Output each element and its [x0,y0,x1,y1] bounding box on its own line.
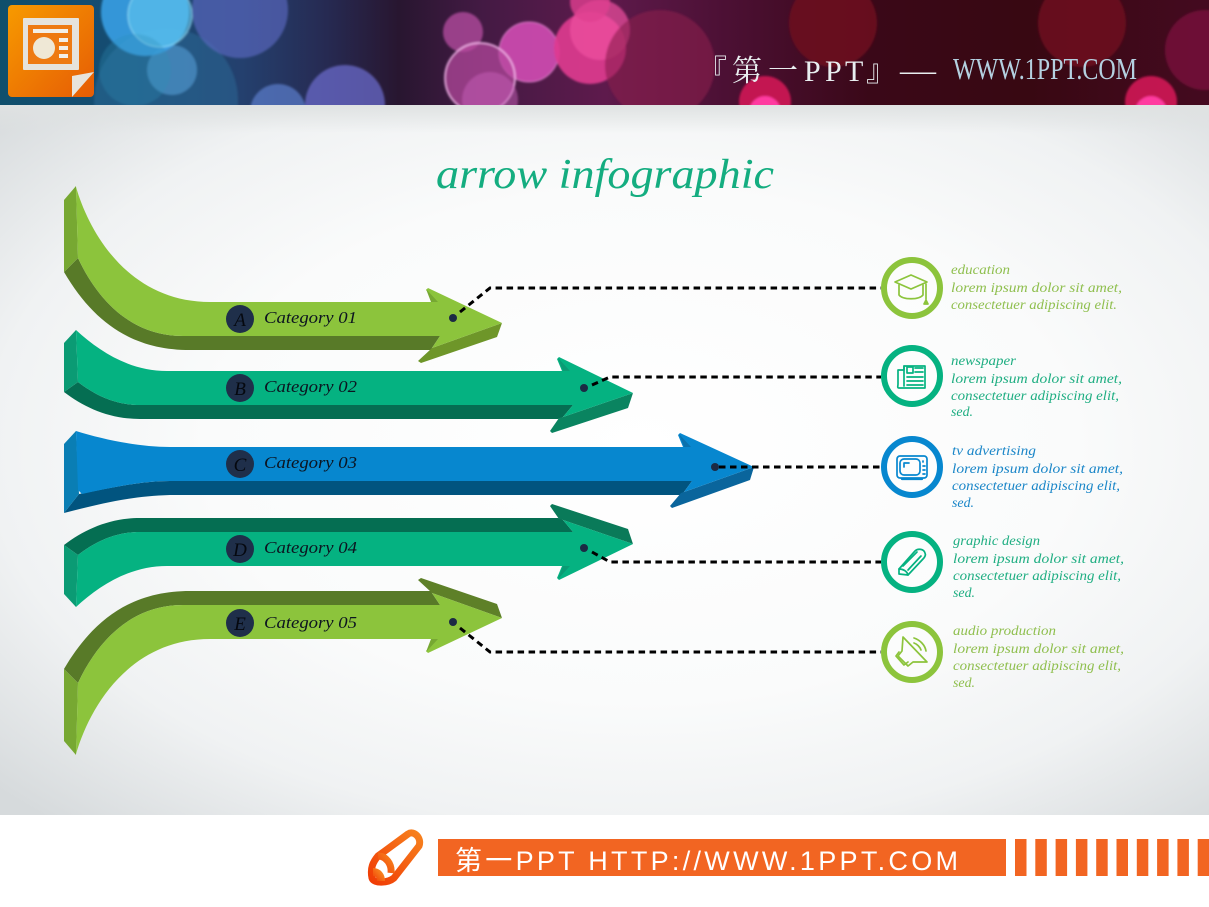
text: tv advertising: tv advertising [952,444,1036,459]
text: tv advertising: lorem ipsum dolor sit amet, [952,462,1123,477]
icon: orange pencil [371,833,420,882]
connector B [580,377,881,392]
text: newspaper: consectetuer adipiscing elit, [951,389,1119,404]
title: arrow infographic [436,152,774,198]
header brand text: WWW.1PPT.COM [953,51,1137,86]
category 02 label: Category 02 [264,377,358,396]
text: graphic design: consectetuer adipiscing elit, [953,569,1121,584]
background panel [0,105,1209,815]
text: audio production: consectetuer adipiscing elit, [953,659,1121,674]
text: graphic design: lorem ipsum dolor sit amet, [953,552,1124,567]
text: education: lorem ipsum dolor sit amet, [951,281,1122,296]
text: education [951,263,1122,313]
text: newspaper: lorem ipsum dolor sit amet, [951,372,1122,387]
category 05 label: Category 05 [264,613,357,632]
text: graphic design: graphic design [953,534,1040,549]
text: tv advertising: consectetuer adipiscing elit, [952,479,1120,494]
arrow C: blue [64,431,754,513]
header brand text: 『第一PPT』 [697,55,896,88]
footer stripes [1015,839,1209,876]
text: graphic design: sed. [953,586,975,601]
text: audio production: lorem ipsum dolor sit amet, [953,642,1124,657]
category 03 label: C [234,455,247,476]
text: tv advertising [952,444,1123,511]
header brand text [715,56,1136,84]
connector D [580,544,881,562]
text: newspaper: newspaper [951,354,1017,369]
text: education: education [951,263,1010,278]
category 03 label: Category 03 [264,453,357,472]
category 04 label [226,535,358,563]
category 04 label: D [232,540,247,561]
icon: speaker [884,624,940,680]
bokeh lights [94,0,1209,105]
icon: tv [884,439,940,495]
footer [0,815,1209,907]
text: newspaper [951,354,1122,420]
header brand text: — [899,54,937,87]
category 05 label: E [233,614,246,635]
text: audio production: sed. [953,676,975,691]
text: graphic design [953,534,1124,601]
arrow E: green [64,578,502,755]
text: audio production [953,624,1124,691]
arrow B: teal [64,330,633,433]
connector A [449,288,881,322]
category 02 label [226,374,358,402]
connector C [711,463,881,471]
text: education: consectetuer adipiscing elit. [951,298,1117,313]
header banner [0,0,1209,105]
category 01 label [226,305,357,333]
category 01 label: Category 01 [264,308,357,327]
text: newspaper: sed. [951,405,973,420]
text: audio production: audio production [953,624,1056,639]
footer bar with url: 第一PPT HTTP://WWW.1PPT.COM [455,846,958,876]
category 03 label [226,450,357,478]
icon: presentation file [8,5,94,97]
arrow D: teal [64,504,633,607]
arrow A: green [64,186,502,363]
text: tv advertising: sed. [952,496,974,511]
connector E [449,618,881,652]
icon: education cap [884,260,940,316]
category 05 label [226,609,357,637]
category 02 label: B [234,379,246,400]
category 04 label: Category 04 [264,538,358,557]
category 01 label: A [232,310,246,331]
icon: newspaper [884,348,940,404]
icon: pencil [884,534,940,590]
